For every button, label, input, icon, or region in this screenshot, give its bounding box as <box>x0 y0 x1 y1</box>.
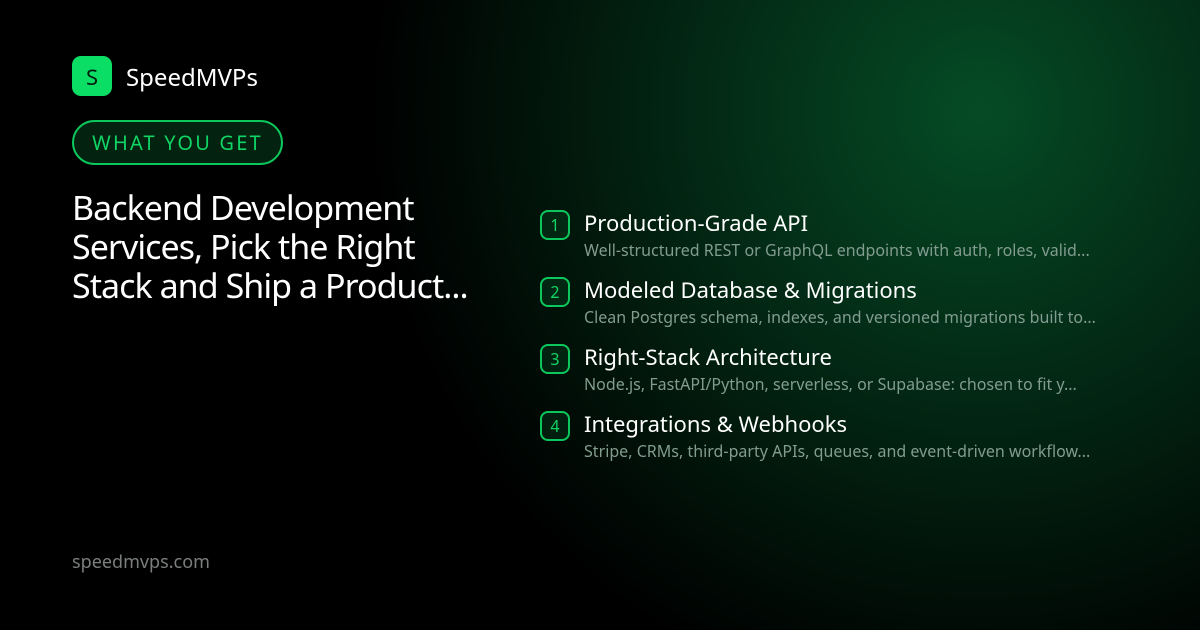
logo mark <box>72 56 112 96</box>
title: Services, Pick the Right <box>72 223 415 269</box>
number badge 4 <box>540 411 570 441</box>
number badge 2: 2 <box>550 281 560 303</box>
feature 1 description: Well-structured REST or GraphQL endpoints with auth, roles, valid... <box>584 239 1090 261</box>
footer url: speedmvps.com <box>72 550 210 574</box>
brand name: SpeedMVPs <box>126 61 258 94</box>
number badge 4: 4 <box>550 415 560 437</box>
feature 1 title: Production-Grade API <box>584 208 808 238</box>
feature 2 description: Clean Postgres schema, indexes, and versioned migrations built to... <box>584 306 1096 328</box>
number badge 1 <box>540 210 570 240</box>
feature 3 description: Node.js, FastAPI/Python, serverless, or Supabase: chosen to fit y... <box>584 373 1077 395</box>
title: Backend Development <box>72 184 414 230</box>
feature 4 description: Stripe, CRMs, third-party APIs, queues, and event-driven workflow... <box>584 440 1090 462</box>
badge: what you get <box>72 120 283 165</box>
title <box>72 184 468 308</box>
number badge 1: 1 <box>550 214 560 236</box>
title: Stack and Ship a Product... <box>72 262 468 308</box>
feature 4 title: Integrations & Webhooks <box>584 409 847 439</box>
badge: what you get: WHAT YOU GET <box>92 129 263 156</box>
number badge 3 <box>540 344 570 374</box>
feature 3 title: Right-Stack Architecture <box>584 342 832 372</box>
number badge 2 <box>540 277 570 307</box>
number badge 3: 3 <box>550 348 560 370</box>
feature 2 title: Modeled Database & Migrations <box>584 275 917 305</box>
logo mark: S <box>86 62 98 92</box>
